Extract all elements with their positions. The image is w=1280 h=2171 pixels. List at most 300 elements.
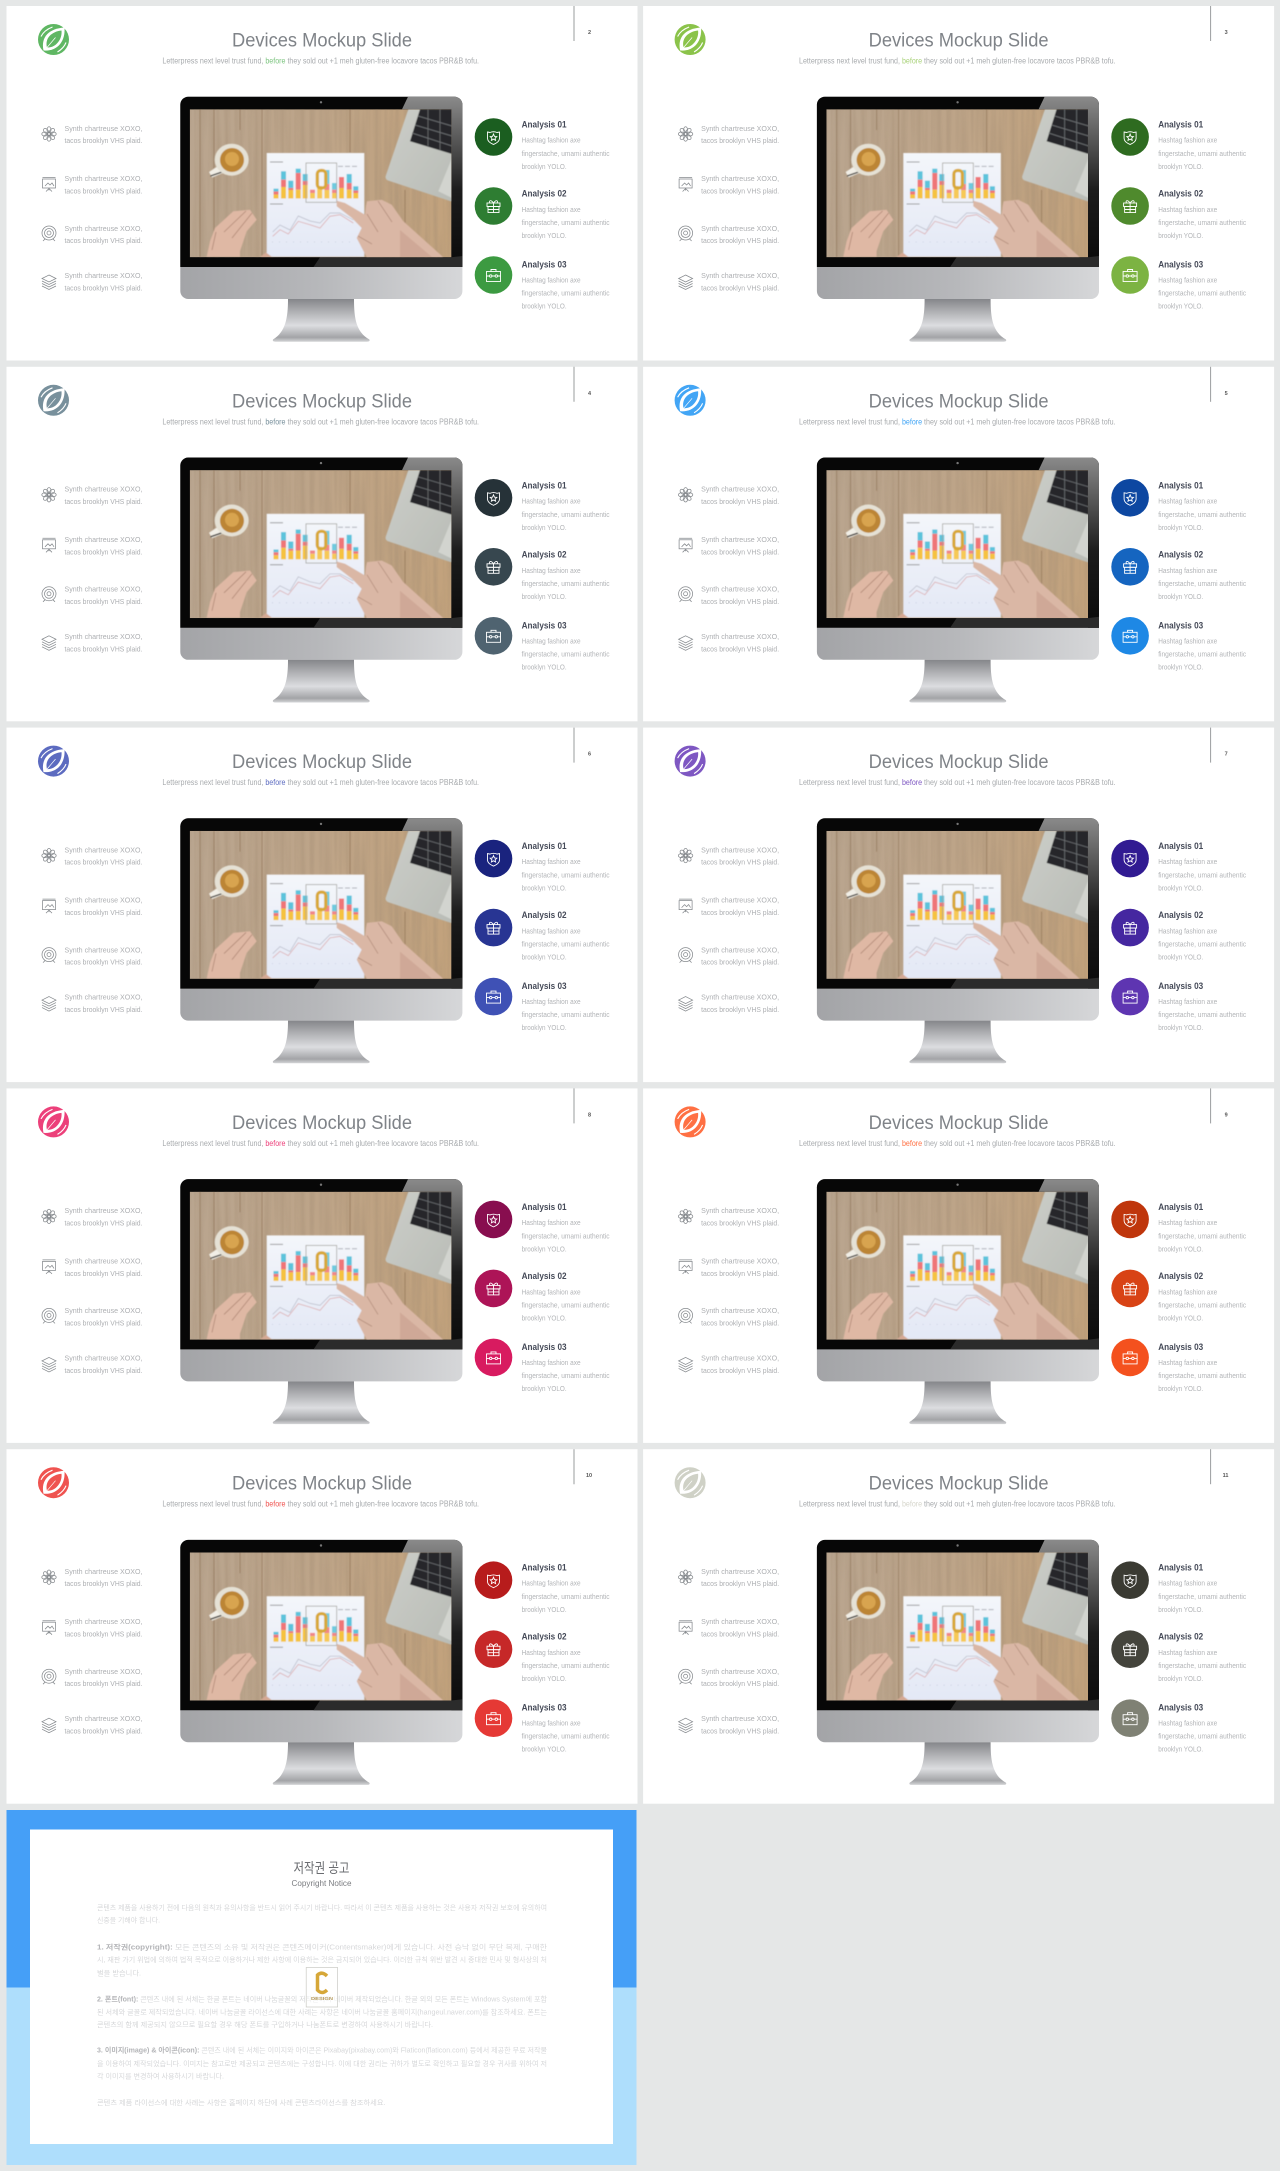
analysis 2: Analysis 02 xyxy=(1158,1632,1203,1642)
analysis 3: fingerstache, umami authentic xyxy=(1158,1373,1247,1380)
feature 4: Synth chartreuse XOXO, xyxy=(701,632,779,641)
feature 2: Synth chartreuse XOXO, xyxy=(64,535,142,544)
feature 1 xyxy=(42,485,142,506)
analysis 1: Hashtag fashion axe xyxy=(522,498,581,505)
analysis 3: Hashtag fashion axe xyxy=(522,638,581,645)
analysis 2: Hashtag fashion axe xyxy=(1158,207,1217,214)
analysis 3: brooklyn YOLO. xyxy=(1158,304,1203,310)
feature 3: Synth chartreuse XOXO, xyxy=(701,1306,779,1315)
monitor mockup xyxy=(180,1540,462,1785)
analysis 2: Analysis 02 xyxy=(522,1632,567,1642)
feature 4: tacos brooklyn VHS plaid. xyxy=(64,1005,142,1014)
analysis 1 xyxy=(1111,1561,1247,1614)
logo xyxy=(675,385,706,416)
feature 2: Synth chartreuse XOXO, xyxy=(701,174,779,183)
subtitle: Letterpress next level trust fund, before they sold out +1 meh gluten-free locavore tacos PBR&B tofu. xyxy=(162,417,479,426)
analysis 1: Hashtag fashion axe xyxy=(1158,138,1217,144)
notice body text: 콘텐츠 제품 라이선스에 대한 사례는 사항은 홈페이지 하단에 사례 콘텐츠라이선스를 참조하세요. xyxy=(97,2098,386,2107)
notice body text: 을 이용하여 제작되었습니다. 이미지는 참고로만 제공되고 콘텐츠에는 구성합니다. 이에 대한 권리는 귀하가 별도로 확인하고 필요할 경우 귀사를 위하여 저 xyxy=(97,2059,547,2068)
analysis 1: Analysis 01 xyxy=(1158,480,1203,490)
feature 1: tacos brooklyn VHS plaid. xyxy=(701,136,779,145)
analysis 2: fingerstache, umami authentic xyxy=(522,1663,610,1670)
analysis list xyxy=(475,118,610,310)
feature 1: tacos brooklyn VHS plaid. xyxy=(64,136,142,145)
notice body text: 신중을 기해야 합니다. xyxy=(97,1916,160,1924)
page number tab: 7 xyxy=(1225,752,1228,758)
feature 1 xyxy=(678,1567,779,1588)
feature 3 xyxy=(42,1306,142,1327)
feature 3: Synth chartreuse XOXO, xyxy=(701,945,779,954)
gold C watermark logo: DESIGN xyxy=(311,1996,333,2001)
logo xyxy=(38,24,69,55)
feature 3: Synth chartreuse XOXO, xyxy=(64,224,142,233)
feature 1: tacos brooklyn VHS plaid. xyxy=(701,858,779,867)
analysis 3 xyxy=(1111,617,1247,671)
feature 4: Synth chartreuse XOXO, xyxy=(64,632,142,641)
analysis 1 xyxy=(1111,1201,1247,1253)
analysis 3: Hashtag fashion axe xyxy=(1158,1360,1217,1367)
feature 1: tacos brooklyn VHS plaid. xyxy=(701,1579,779,1588)
feature 1: tacos brooklyn VHS plaid. xyxy=(64,1218,142,1227)
blue backdrop bottom xyxy=(6,1988,636,2165)
analysis 3 xyxy=(475,1339,610,1393)
analysis 1: brooklyn YOLO. xyxy=(522,886,567,893)
analysis list xyxy=(1111,1561,1247,1754)
page number tab: 3 xyxy=(1225,30,1228,36)
feature 2: Synth chartreuse XOXO, xyxy=(64,896,142,905)
feature 3: tacos brooklyn VHS plaid. xyxy=(701,236,779,245)
slide panel xyxy=(6,1449,638,1804)
feature 1 xyxy=(42,1567,142,1588)
analysis 3: Hashtag fashion axe xyxy=(522,278,581,284)
feature 4: tacos brooklyn VHS plaid. xyxy=(701,1005,779,1014)
title: Devices Mockup Slide xyxy=(232,1474,412,1495)
analysis 3: fingerstache, umami authentic xyxy=(522,1373,610,1380)
analysis 1: Analysis 01 xyxy=(522,1563,567,1573)
analysis 3: brooklyn YOLO. xyxy=(522,664,567,671)
feature 3: tacos brooklyn VHS plaid. xyxy=(701,1318,779,1327)
feature 2 xyxy=(42,1256,142,1278)
panel: copyright notice xyxy=(6,1810,636,2165)
logo xyxy=(38,746,69,777)
slide: page 2 green xyxy=(6,6,638,360)
analysis 2: Analysis 02 xyxy=(1158,1271,1203,1281)
analysis 1 xyxy=(1111,118,1247,171)
monitor mockup xyxy=(180,458,462,702)
analysis 2: brooklyn YOLO. xyxy=(522,1315,567,1322)
analysis 2: brooklyn YOLO. xyxy=(522,594,567,601)
analysis 2: Analysis 02 xyxy=(522,188,567,198)
notice body text: 된 서체와 글꼴로 제작되었습니다. 네이버 나눔글꼴 라이선스에 대한 사례는 사항은 네이버 나눔글꼴 홈페이지(hangeul.naver.com)를 참조하세요. 폰트는 xyxy=(97,2007,548,2016)
analysis 1: Analysis 01 xyxy=(1158,1202,1203,1212)
analysis 1: Hashtag fashion axe xyxy=(1158,1220,1217,1227)
analysis 2: Hashtag fashion axe xyxy=(1158,1289,1217,1296)
feature 2 xyxy=(679,896,779,917)
analysis 1: Analysis 01 xyxy=(1158,1563,1203,1573)
feature 1: Synth chartreuse XOXO, xyxy=(64,1567,142,1576)
analysis 2: fingerstache, umami authentic xyxy=(1158,581,1247,588)
analysis 1: Analysis 01 xyxy=(522,120,567,130)
page number tab: 8 xyxy=(588,1112,591,1118)
feature 2: Synth chartreuse XOXO, xyxy=(701,1256,779,1265)
monitor mockup xyxy=(817,818,1099,1063)
left feature list xyxy=(42,1567,142,1736)
page number tab xyxy=(574,367,592,402)
logo xyxy=(675,746,706,777)
analysis 1 xyxy=(475,1201,610,1253)
analysis 3 xyxy=(475,617,610,671)
logo xyxy=(38,385,69,416)
analysis 2: Hashtag fashion axe xyxy=(522,1289,581,1296)
analysis list xyxy=(1111,118,1247,310)
analysis 2: brooklyn YOLO. xyxy=(1158,1676,1203,1683)
slide panel xyxy=(6,367,638,721)
analysis 3: Analysis 03 xyxy=(1158,1342,1203,1352)
logo xyxy=(675,1467,706,1498)
feature 4: Synth chartreuse XOXO, xyxy=(701,271,779,280)
left feature list xyxy=(678,845,779,1014)
analysis 1: fingerstache, umami authentic xyxy=(1158,512,1247,519)
analysis list xyxy=(1111,1201,1247,1393)
analysis 1: Analysis 01 xyxy=(1158,120,1203,130)
page number tab: 6 xyxy=(588,752,591,758)
notice heading: 저작권 공고 xyxy=(294,1860,350,1876)
white notice card xyxy=(30,1830,613,2144)
analysis 3: fingerstache, umami authentic xyxy=(522,290,610,298)
monitor mockup xyxy=(180,1179,462,1424)
feature 4: Synth chartreuse XOXO, xyxy=(701,993,779,1002)
analysis 2: fingerstache, umami authentic xyxy=(522,220,610,227)
title: Devices Mockup Slide xyxy=(232,1113,412,1134)
analysis 1 xyxy=(1111,840,1247,893)
feature 1: Synth chartreuse XOXO, xyxy=(64,485,142,494)
analysis 1: Hashtag fashion axe xyxy=(1158,859,1217,866)
feature 1 xyxy=(42,1206,142,1227)
title: Devices Mockup Slide xyxy=(232,30,412,52)
feature 2: tacos brooklyn VHS plaid. xyxy=(64,1269,142,1278)
analysis 2 xyxy=(475,548,610,601)
analysis 1: brooklyn YOLO. xyxy=(1158,164,1203,171)
feature 4: tacos brooklyn VHS plaid. xyxy=(701,1727,779,1736)
slide panel xyxy=(643,728,1274,1082)
feature 3 xyxy=(42,1667,142,1688)
analysis 1: fingerstache, umami authentic xyxy=(1158,151,1247,158)
analysis 3: brooklyn YOLO. xyxy=(1158,1386,1203,1393)
left feature list xyxy=(42,845,142,1014)
analysis 3: Analysis 03 xyxy=(522,1342,567,1352)
feature 3 xyxy=(679,224,779,245)
page number tab xyxy=(574,6,591,41)
analysis list xyxy=(475,479,610,671)
analysis 2 xyxy=(1111,187,1247,240)
logo xyxy=(675,24,706,55)
feature 1: Synth chartreuse XOXO, xyxy=(701,1567,779,1576)
left feature list xyxy=(42,124,142,292)
feature 2: tacos brooklyn VHS plaid. xyxy=(64,547,142,556)
analysis 2: fingerstache, umami authentic xyxy=(1158,1663,1247,1670)
analysis 3: fingerstache, umami authentic xyxy=(522,651,610,658)
subtitle: Letterpress next level trust fund, before they sold out +1 meh gluten-free locavore tacos PBR&B tofu. xyxy=(162,56,479,66)
title: Devices Mockup Slide xyxy=(869,391,1049,412)
analysis 2: brooklyn YOLO. xyxy=(522,233,567,240)
subtitle: Letterpress next level trust fund, before they sold out +1 meh gluten-free locavore tacos PBR&B tofu. xyxy=(162,778,479,787)
slide: page 6 indigo xyxy=(6,728,638,1082)
feature 4: tacos brooklyn VHS plaid. xyxy=(701,1366,779,1375)
monitor mockup xyxy=(817,1179,1099,1424)
feature 3: tacos brooklyn VHS plaid. xyxy=(64,597,142,606)
subtitle: Letterpress next level trust fund, before they sold out +1 meh gluten-free locavore tacos PBR&B tofu. xyxy=(162,1139,479,1148)
title: Devices Mockup Slide xyxy=(232,752,412,773)
analysis 2: Hashtag fashion axe xyxy=(522,568,581,575)
analysis 1: brooklyn YOLO. xyxy=(1158,1246,1203,1253)
slide: page 4 slate xyxy=(6,367,638,721)
feature 3: tacos brooklyn VHS plaid. xyxy=(64,1318,142,1327)
analysis 1: brooklyn YOLO. xyxy=(1158,1607,1203,1614)
notice body text: 벌을 받습니다. xyxy=(97,1968,141,1977)
feature 1: tacos brooklyn VHS plaid. xyxy=(701,1218,779,1227)
feature 4: Synth chartreuse XOXO, xyxy=(64,1353,142,1362)
feature 1: Synth chartreuse XOXO, xyxy=(64,845,142,854)
gold C watermark logo xyxy=(306,1968,338,2007)
feature 3 xyxy=(679,1667,779,1688)
analysis 2: Hashtag fashion axe xyxy=(1158,929,1217,936)
slide panel xyxy=(6,728,638,1082)
feature 3 xyxy=(42,224,142,245)
feature 2: tacos brooklyn VHS plaid. xyxy=(701,1269,779,1278)
feature 4: Synth chartreuse XOXO, xyxy=(64,1714,142,1723)
slide: page 7 purple xyxy=(643,728,1274,1082)
feature 3 xyxy=(679,945,779,967)
blue backdrop top xyxy=(6,1810,636,1988)
analysis 3: Hashtag fashion axe xyxy=(522,1360,581,1367)
feature 4: tacos brooklyn VHS plaid. xyxy=(64,1727,142,1736)
analysis 2 xyxy=(1111,1270,1247,1322)
left feature list xyxy=(42,485,142,653)
feature 3: tacos brooklyn VHS plaid. xyxy=(64,1679,142,1688)
notice subheading: Copyright Notice xyxy=(292,1878,352,1888)
analysis 1 xyxy=(1111,479,1247,532)
analysis 2 xyxy=(1111,1630,1247,1683)
title: Devices Mockup Slide xyxy=(869,1474,1049,1495)
analysis 3: Hashtag fashion axe xyxy=(522,999,581,1006)
title: Devices Mockup Slide xyxy=(869,1113,1049,1134)
feature 2: Synth chartreuse XOXO, xyxy=(64,1617,142,1626)
analysis 3: Analysis 03 xyxy=(522,981,567,991)
feature 4: tacos brooklyn VHS plaid. xyxy=(64,1366,142,1375)
feature 2: tacos brooklyn VHS plaid. xyxy=(64,186,142,196)
analysis 2: fingerstache, umami authentic xyxy=(522,581,610,588)
feature 2: tacos brooklyn VHS plaid. xyxy=(701,908,779,917)
analysis list xyxy=(475,1201,610,1393)
left feature list xyxy=(678,124,779,292)
analysis 3: Analysis 03 xyxy=(1158,981,1203,991)
analysis 3 xyxy=(475,256,610,310)
analysis 3: fingerstache, umami authentic xyxy=(1158,290,1247,298)
feature 4 xyxy=(679,271,779,292)
analysis 3: brooklyn YOLO. xyxy=(522,304,567,310)
analysis 2: fingerstache, umami authentic xyxy=(1158,942,1247,949)
monitor mockup xyxy=(180,818,462,1063)
logo xyxy=(38,1467,69,1498)
feature 2 xyxy=(42,174,142,196)
analysis 1: fingerstache, umami authentic xyxy=(522,1233,610,1240)
left feature list xyxy=(678,1206,779,1375)
analysis 2: Analysis 02 xyxy=(522,910,567,920)
analysis 2 xyxy=(475,187,610,240)
subtitle: Letterpress next level trust fund, before they sold out +1 meh gluten-free locavore tacos PBR&B tofu. xyxy=(799,417,1116,426)
analysis 3: fingerstache, umami authentic xyxy=(522,1012,610,1019)
analysis 2: Analysis 02 xyxy=(522,1271,567,1281)
subtitle: Letterpress next level trust fund, before they sold out +1 meh gluten-free locavore tacos PBR&B tofu. xyxy=(799,778,1116,787)
feature 1: Synth chartreuse XOXO, xyxy=(701,845,779,854)
page number tab: 4 xyxy=(588,391,592,397)
feature 4 xyxy=(42,1353,142,1375)
analysis 1: brooklyn YOLO. xyxy=(522,525,567,532)
analysis 3: brooklyn YOLO. xyxy=(522,1386,567,1393)
feature 1 xyxy=(678,1206,779,1227)
analysis 2: brooklyn YOLO. xyxy=(1158,955,1203,962)
analysis 3: brooklyn YOLO. xyxy=(1158,664,1203,671)
feature 2: Synth chartreuse XOXO, xyxy=(701,535,779,544)
slide: page 9 orange xyxy=(643,1088,1274,1443)
feature 4: tacos brooklyn VHS plaid. xyxy=(701,284,779,292)
feature 4 xyxy=(42,271,142,292)
page number tab xyxy=(1211,1449,1228,1484)
page number tab: 10 xyxy=(586,1473,592,1479)
analysis 2: Hashtag fashion axe xyxy=(522,929,581,936)
feature 2: Synth chartreuse XOXO, xyxy=(701,896,779,905)
left feature list xyxy=(678,485,779,653)
page number tab: 9 xyxy=(1225,1112,1228,1118)
slide: page 11 grey olive xyxy=(643,1449,1274,1804)
subtitle: Letterpress next level trust fund, before they sold out +1 meh gluten-free locavore tacos PBR&B tofu. xyxy=(162,1500,479,1509)
feature 4: Synth chartreuse XOXO, xyxy=(64,993,142,1002)
analysis 1: fingerstache, umami authentic xyxy=(522,873,610,880)
feature 2: Synth chartreuse XOXO, xyxy=(64,174,142,183)
analysis 1: fingerstache, umami authentic xyxy=(522,512,610,519)
slide panel xyxy=(6,1088,638,1443)
analysis 3: Analysis 03 xyxy=(522,260,567,270)
logo xyxy=(675,1106,706,1137)
feature 4 xyxy=(679,1353,779,1375)
feature 3: tacos brooklyn VHS plaid. xyxy=(64,958,142,967)
analysis 2: fingerstache, umami authentic xyxy=(522,1302,610,1309)
feature 2: tacos brooklyn VHS plaid. xyxy=(701,186,779,196)
slide: page 3 light green xyxy=(643,6,1274,360)
slide: page 5 blue xyxy=(643,367,1274,721)
analysis 2 xyxy=(475,1630,610,1683)
feature 2 xyxy=(42,896,142,917)
analysis 1: fingerstache, umami authentic xyxy=(522,151,610,158)
notice body text: 콘텐츠 제품을 사용하기 전에 다음의 원칙과 유의사항을 반드시 읽어 주시기 바랍니다. 따라서 이 콘텐츠 제품을 사용하는 것은 사용자 저작권 보호에 유의하여 xyxy=(97,1903,547,1912)
feature 4: tacos brooklyn VHS plaid. xyxy=(701,644,779,653)
analysis 3: Analysis 03 xyxy=(522,620,567,630)
analysis 1: Hashtag fashion axe xyxy=(522,1220,581,1227)
analysis 2: fingerstache, umami authentic xyxy=(1158,220,1247,227)
analysis 2: Analysis 02 xyxy=(522,549,567,559)
feature 3: Synth chartreuse XOXO, xyxy=(64,945,142,954)
analysis list xyxy=(475,1561,610,1754)
analysis 2: brooklyn YOLO. xyxy=(1158,594,1203,601)
analysis 2: Hashtag fashion axe xyxy=(522,1650,581,1657)
feature 3: Synth chartreuse XOXO, xyxy=(701,585,779,594)
analysis 1: fingerstache, umami authentic xyxy=(1158,1594,1247,1601)
notice body text: 콘텐츠의 함께 제공되지 않으므로 필요할 경우 해당 폰트를 구입하거나 나눔폰트로 변경하여 사용하시기 바랍니다. xyxy=(97,2020,433,2029)
analysis 3 xyxy=(1111,256,1247,310)
feature 3 xyxy=(42,585,142,606)
title: Devices Mockup Slide xyxy=(869,752,1049,773)
feature 3: tacos brooklyn VHS plaid. xyxy=(701,958,779,967)
analysis 3: fingerstache, umami authentic xyxy=(522,1734,610,1741)
feature 3: tacos brooklyn VHS plaid. xyxy=(701,1679,779,1688)
page number tab: 5 xyxy=(1225,391,1228,397)
analysis 3: Analysis 03 xyxy=(1158,620,1203,630)
feature 2: tacos brooklyn VHS plaid. xyxy=(701,547,779,556)
analysis 3: Hashtag fashion axe xyxy=(522,1721,581,1728)
feature 1 xyxy=(678,485,779,506)
feature 1: Synth chartreuse XOXO, xyxy=(701,124,779,133)
slide panel xyxy=(643,1088,1274,1443)
analysis 3: fingerstache, umami authentic xyxy=(1158,1734,1247,1741)
analysis 3: Analysis 03 xyxy=(1158,1703,1203,1713)
analysis 1 xyxy=(475,118,610,171)
analysis 1: fingerstache, umami authentic xyxy=(1158,873,1247,880)
feature 3: Synth chartreuse XOXO, xyxy=(64,1667,142,1676)
analysis 3: Hashtag fashion axe xyxy=(1158,1721,1217,1728)
analysis 3: brooklyn YOLO. xyxy=(1158,1025,1203,1032)
notice body text: 각 이미지를 변경하여 사용하시기 바랍니다. xyxy=(97,2072,224,2081)
feature 3: Synth chartreuse XOXO, xyxy=(701,1667,779,1676)
slide panel xyxy=(643,1449,1274,1804)
analysis 3: fingerstache, umami authentic xyxy=(1158,651,1247,658)
feature 3 xyxy=(679,585,779,606)
feature 4 xyxy=(679,632,779,653)
analysis 1: brooklyn YOLO. xyxy=(522,1246,567,1253)
feature 2 xyxy=(42,535,142,556)
analysis 3: fingerstache, umami authentic xyxy=(1158,1012,1247,1019)
page number tab xyxy=(1211,367,1228,402)
analysis 3: brooklyn YOLO. xyxy=(522,1747,567,1754)
analysis 3 xyxy=(1111,1339,1247,1393)
analysis 1 xyxy=(475,479,610,532)
feature 1: Synth chartreuse XOXO, xyxy=(701,1206,779,1215)
feature 4: Synth chartreuse XOXO, xyxy=(701,1353,779,1362)
feature 3: tacos brooklyn VHS plaid. xyxy=(701,597,779,606)
left feature list xyxy=(678,1567,779,1736)
analysis 1: Hashtag fashion axe xyxy=(1158,1581,1217,1588)
analysis 2: Hashtag fashion axe xyxy=(1158,568,1217,575)
feature 1: Synth chartreuse XOXO, xyxy=(701,485,779,494)
analysis 1: Analysis 01 xyxy=(522,1202,567,1212)
feature 3: Synth chartreuse XOXO, xyxy=(64,1306,142,1315)
analysis 2: brooklyn YOLO. xyxy=(522,955,567,962)
analysis 3: Analysis 03 xyxy=(522,1703,567,1713)
analysis 1: Analysis 01 xyxy=(1158,841,1203,851)
analysis 2: brooklyn YOLO. xyxy=(522,1676,567,1683)
analysis 1: brooklyn YOLO. xyxy=(522,1607,567,1614)
analysis 3: brooklyn YOLO. xyxy=(1158,1747,1203,1754)
feature 2: Synth chartreuse XOXO, xyxy=(64,1256,142,1265)
feature 4: tacos brooklyn VHS plaid. xyxy=(64,284,142,292)
notice body text: 시, 재판 가기 위법에 의하여 법적 목적으로 이용하거나 제한 사항에 이용하는 것은 금지되어 있습니다. 이러한 규칙 위반 발견 시 중대한 민사 및 형사상의 처 xyxy=(97,1955,547,1964)
slide panel xyxy=(6,6,638,360)
feature 2: Synth chartreuse XOXO, xyxy=(701,1617,779,1626)
slide panel xyxy=(643,6,1274,360)
monitor mockup xyxy=(817,1540,1099,1785)
feature 1 xyxy=(678,124,779,145)
page number tab xyxy=(1211,1088,1228,1123)
notice body text: 3. 이미지(image) & 아이콘(icon): 콘텐츠 내에 된 서체는 이미지와 아이콘은 Pixabay(pixabay.com)와 Flaticon(flaticon.com) 등에서 제공한 무료 저작물 xyxy=(97,2046,548,2055)
